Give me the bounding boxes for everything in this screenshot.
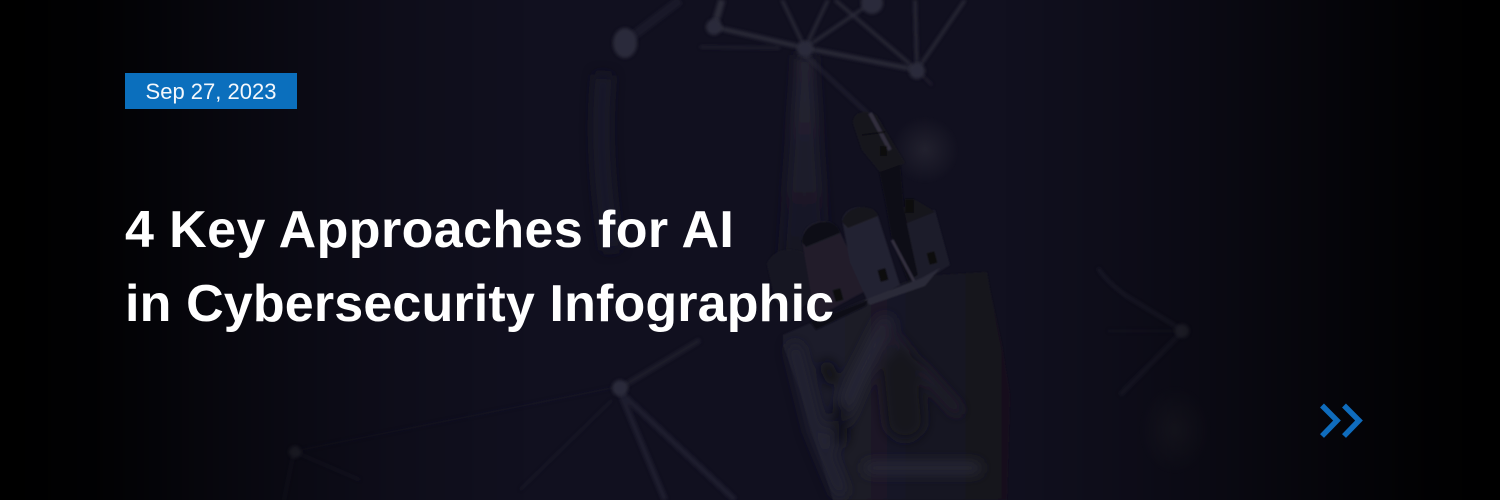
palm xyxy=(783,272,1010,500)
network lines xyxy=(284,0,1182,500)
outer fingers and raised index finger xyxy=(767,112,950,330)
title: 4 Key Approaches for AI xyxy=(125,201,734,259)
palm shading xyxy=(795,325,975,490)
date badge: Sep 27, 2023 xyxy=(146,79,276,104)
title: in Cybersecurity Infographic xyxy=(125,275,834,333)
soft glows xyxy=(891,116,959,184)
network nodes xyxy=(289,0,1189,458)
title xyxy=(125,201,834,333)
vertical light beam xyxy=(778,55,830,300)
icon: double chevron arrow xyxy=(1320,404,1363,438)
robotic hand xyxy=(767,112,1010,500)
date badge xyxy=(125,73,297,109)
